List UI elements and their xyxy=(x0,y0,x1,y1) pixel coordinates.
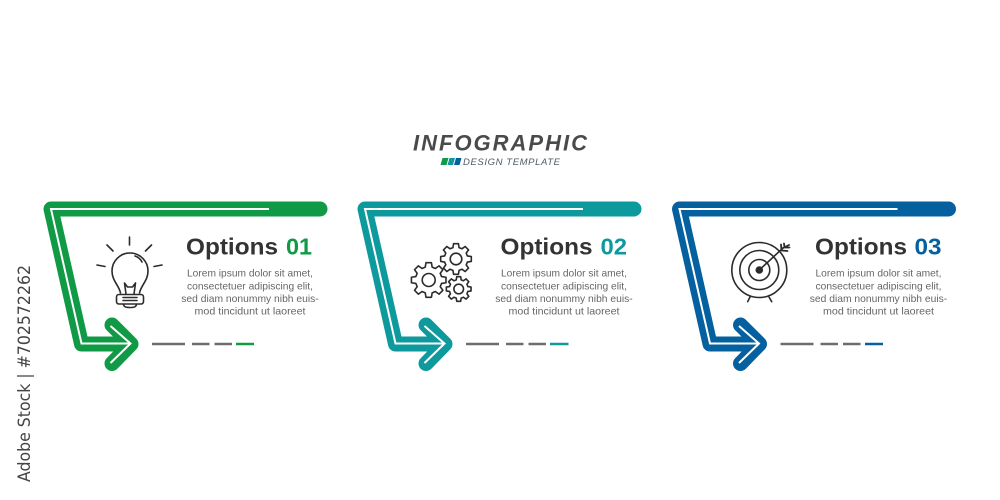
body text 02 xyxy=(495,268,633,318)
dashed progress line 03 xyxy=(780,343,883,345)
body text 03: sed diam nonummy nibh euis- xyxy=(810,293,948,305)
heading 02: Options xyxy=(500,234,592,260)
body text 01: consectetuer adipiscing elit, xyxy=(187,280,313,292)
body text 01: Lorem ipsum dolor sit amet, xyxy=(187,268,313,280)
icon: gears xyxy=(411,244,471,301)
vertical stock credit: Adobe Stock | #702572262 xyxy=(15,265,35,482)
body text 02: consectetuer adipiscing elit, xyxy=(501,280,627,292)
heading 03: 03 xyxy=(914,234,942,260)
icon: target with arrow xyxy=(732,242,790,302)
body text 03 xyxy=(810,268,948,318)
dashed progress line 01 xyxy=(152,343,254,345)
icon: light bulb xyxy=(97,237,162,308)
heading 01: Options xyxy=(186,234,278,260)
small gear xyxy=(446,277,471,301)
dashed progress line 02 xyxy=(466,343,568,345)
arrow frame teal xyxy=(365,209,634,364)
panel: option 03 xyxy=(680,209,948,364)
arrow frame blue xyxy=(680,209,948,364)
body text 03: consectetuer adipiscing elit, xyxy=(816,280,942,292)
body text 02: mod tincidunt ut laoreet xyxy=(508,306,620,318)
subtitle: DESIGN TEMPLATE xyxy=(463,157,561,168)
heading 02: 02 xyxy=(600,234,627,260)
heading 03: Options xyxy=(815,234,907,260)
title colour bars xyxy=(440,158,462,165)
top gear xyxy=(441,244,471,274)
panel: option 01 xyxy=(51,209,320,364)
body text 03: mod tincidunt ut laoreet xyxy=(823,306,934,318)
heading 01: 01 xyxy=(286,234,312,260)
arrow frame green xyxy=(51,209,320,364)
body text 01: sed diam nonummy nibh euis- xyxy=(181,293,319,305)
body text 02: sed diam nonummy nibh euis- xyxy=(495,293,633,305)
panel: option 02 xyxy=(365,209,634,364)
body text 02: Lorem ipsum dolor sit amet, xyxy=(501,268,627,280)
large gear xyxy=(411,263,446,297)
body text 01: mod tincidunt ut laoreet xyxy=(194,306,306,318)
body text 01 xyxy=(181,268,319,318)
body text 03: Lorem ipsum dolor sit amet, xyxy=(816,268,942,280)
title: INFOGRAPHIC xyxy=(413,130,588,156)
title block xyxy=(413,130,588,168)
